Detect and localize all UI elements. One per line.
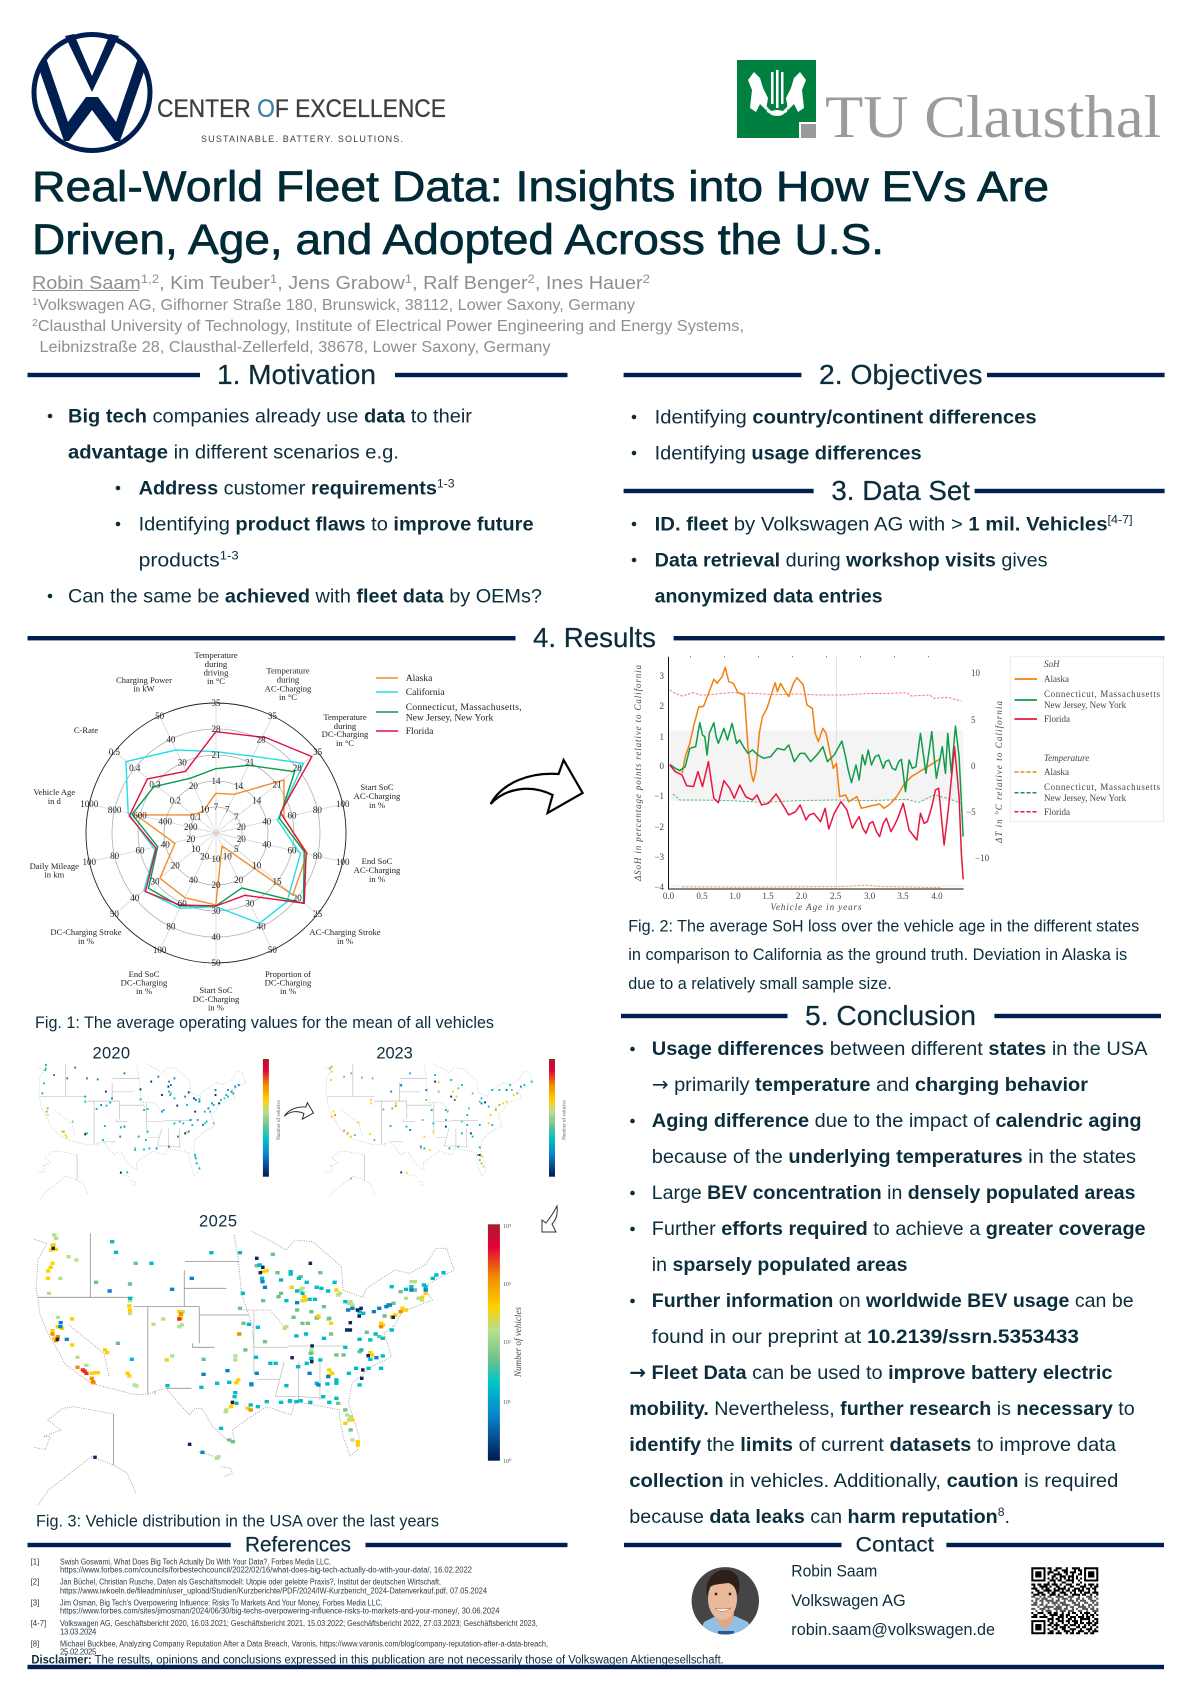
map: vehicles 2023: 2023 xyxy=(376,1044,413,1062)
chart axes labels: 1.5 xyxy=(762,891,774,901)
text: motivation bullets: 1-3 xyxy=(220,548,239,562)
logo: Volkswagen Center of Excellence xyxy=(34,34,446,150)
text: motivation bullets: Can the same be achieved with fleet data by OEMs? xyxy=(68,585,542,607)
authors and affiliations: , Ralf Benger xyxy=(412,273,528,293)
caption: figure 1: Fig. 1: The average operating values for the mean of all vehicles xyxy=(35,1014,494,1032)
radar tick values: 28 xyxy=(212,724,221,734)
radar axis labels: Temperature xyxy=(323,712,367,722)
radar tick values: 40 xyxy=(262,840,272,850)
text: motivation bullets: advantage in different scenarios e.g. xyxy=(68,441,399,463)
radar tick values: 5 xyxy=(234,844,239,854)
text: reference list: [8] xyxy=(31,1639,39,1648)
authors and affiliations: , Ines Hauer xyxy=(535,273,643,293)
radar tick values: 20 xyxy=(186,834,196,844)
radar axis labels: AC-Charging xyxy=(354,865,401,875)
radar axis labels: in % xyxy=(369,800,385,810)
line chart: SoH loss over vehicle age xyxy=(633,657,1164,912)
text: contact details: Robin Saam xyxy=(791,1563,877,1581)
radar axis labels: DC-Charging Stroke xyxy=(50,927,122,937)
authors and affiliations: 2 xyxy=(528,272,535,286)
text: reference list: Michael Buckbee, Analyzing Company Reputation After a Data Breach, Varonis, https://www.varonis.com/blog/company-reputation-after-a-data-breach, xyxy=(60,1639,548,1648)
chart legend: Temperature xyxy=(1044,753,1089,763)
radar axis labels: End SoC xyxy=(129,969,160,979)
radar tick values: 20 xyxy=(189,781,198,791)
map: vehicles 2020 xyxy=(38,1044,282,1200)
chart legend xyxy=(1010,657,1164,822)
radar tick values: 0.3 xyxy=(149,779,161,789)
text: conclusion summary: → Fleet Data can be used to improve battery electric xyxy=(629,1361,1113,1384)
text: conclusion bullets: because of the underlying temperatures in the states xyxy=(652,1146,1136,1168)
radar tick values: 25 xyxy=(313,909,323,919)
panel: contact xyxy=(624,1534,1164,1639)
radar tick values: 40 xyxy=(189,875,198,885)
caption: figure 3: Fig. 3: Vehicle distribution in the USA over the last years xyxy=(36,1513,439,1531)
text: reference list: https://www.forbes.com/sites/jimosman/2024/06/30/big-techs-overpowering-influence-risks-to-markets-and-your-money/, 30.06.2024 xyxy=(60,1607,500,1616)
colorbar: number of vehicles: 10² xyxy=(503,1340,511,1346)
radar legend: California xyxy=(406,687,445,698)
text: conclusion bullets: Aging difference due to the impact of calendric aging xyxy=(652,1110,1142,1132)
chart legend: Florida xyxy=(1044,714,1070,724)
chart axes labels: ΔT in °C relative to California xyxy=(994,700,1004,844)
radar axis labels: in % xyxy=(78,936,94,946)
radar axis labels: in % xyxy=(136,986,152,996)
text: contact details: robin.saam@volkswagen.de xyxy=(791,1621,995,1639)
text: contact details: Volkswagen AG xyxy=(791,1592,906,1610)
chart series xyxy=(670,667,963,888)
chart axes labels: −2 xyxy=(654,822,664,832)
radar tick values: 100 xyxy=(83,857,97,867)
map: vehicles 2020: Number of vehicles xyxy=(277,1100,282,1140)
text: reference list: [3] xyxy=(31,1599,39,1608)
radar axis labels: Daily Mileage xyxy=(30,861,79,871)
radar tick values: 14 xyxy=(212,776,221,786)
radar tick values: 10 xyxy=(200,805,210,815)
radar tick values: 14 xyxy=(234,781,244,791)
authors and affiliations: 1 xyxy=(270,272,278,286)
radar tick values: 100 xyxy=(336,857,350,867)
title: Driven, Age, and Adopted Across the U.S. xyxy=(32,216,884,264)
text: conclusion summary: because data leaks can harm reputation xyxy=(629,1506,996,1528)
radar axis labels: End SoC xyxy=(362,856,393,866)
text: objectives bullets: Identifying country/continent differences xyxy=(655,406,1037,428)
radar axis labels: in °C xyxy=(207,676,225,686)
radar axis labels: Vehicle Age xyxy=(33,787,75,797)
text: motivation bullets: Identifying product flaws to improve future xyxy=(139,513,534,535)
radar axis labels: Start SoC xyxy=(360,782,394,792)
chart axes labels: −3 xyxy=(654,852,664,862)
text: contact details xyxy=(791,1563,995,1639)
radar axis labels: in km xyxy=(44,870,65,880)
radar tick values: 0.4 xyxy=(129,763,141,773)
chart axes labels: 4.0 xyxy=(931,891,943,901)
radar tick values: 7 xyxy=(225,805,230,815)
authors and affiliations: 2 xyxy=(32,318,38,329)
radar axis labels: in % xyxy=(337,936,353,946)
authors and affiliations: 1 xyxy=(32,297,38,308)
radar tick values: 35 xyxy=(313,747,323,757)
text: reference list: [1] xyxy=(31,1558,39,1566)
radar legend xyxy=(376,673,522,737)
QR code xyxy=(1031,1567,1098,1634)
radar axis labels: in % xyxy=(208,1002,224,1012)
chart axes labels: 2.0 xyxy=(796,891,808,901)
text: reference list: Swish Goswami, What Does Big Tech Actually Do With Your Data?, Forbes Media LLC, xyxy=(60,1558,331,1566)
radar tick values: 50 xyxy=(155,711,165,721)
radar tick values: 1000 xyxy=(80,799,99,809)
radar legend: Connecticut, Massachusetts, xyxy=(406,702,522,713)
text: data set bullets: [4-7] xyxy=(1108,513,1133,527)
text: conclusion bullets: Large BEV concentration in densely populated areas xyxy=(652,1182,1136,1204)
chart axes labels: 3.5 xyxy=(897,891,909,901)
text: reference list: [2] xyxy=(31,1578,39,1587)
radar axis labels: Proportion of xyxy=(265,969,311,979)
radar tick values: 60 xyxy=(288,845,297,855)
photo: Robin Saam xyxy=(690,1565,760,1637)
radar tick values: 20 xyxy=(237,822,246,832)
radar tick values: 200 xyxy=(184,822,198,832)
caption: figure 2: Fig. 2: The average SoH loss over the vehicle age in the different states xyxy=(628,918,1139,936)
title: Real-World Fleet Data: Insights into How EVs Are xyxy=(32,163,1049,211)
chart legend: Connecticut, Massachusetts xyxy=(1044,689,1160,699)
panel: data set xyxy=(624,475,1165,608)
radar tick values: 20 xyxy=(171,860,180,870)
title xyxy=(32,163,1049,264)
text: conclusion bullets: Usage differences between different states in the USA xyxy=(652,1038,1148,1060)
radar tick values: 60 xyxy=(178,898,187,908)
map: vehicles 2020: 2020 xyxy=(92,1044,130,1062)
map: vehicles 2025: 2025 xyxy=(199,1213,237,1231)
radar tick values: 21 xyxy=(212,750,220,760)
chart axes labels: −4 xyxy=(654,882,664,892)
map: vehicles 2025 xyxy=(34,1213,523,1505)
caption: figure 2 xyxy=(628,918,1139,993)
radar tick values: 10 xyxy=(223,851,232,861)
disclaimer: Disclaimer: The results, opinions and conclusions expressed in this publication are not necessarily those of Volkswagen Aktiengesellschaft. xyxy=(31,1654,724,1666)
colorbar: number of vehicles xyxy=(488,1224,523,1465)
text: reference list: https://www.forbes.com/councils/forbestechcouncil/2022/02/16/what-does-big-tech-actually-do-with-your-data/, 16.02.2022 xyxy=(60,1566,472,1575)
radar axis labels: in d xyxy=(48,796,62,806)
text: conclusion bullets: Further efforts required to achieve a greater coverage xyxy=(652,1218,1146,1240)
radar tick values: 40 xyxy=(212,932,221,942)
authors and affiliations: 1,2 xyxy=(141,272,160,286)
radar tick values: 80 xyxy=(110,851,120,861)
radar tick values: 30 xyxy=(245,898,255,908)
text: conclusion bullets: found in our preprint at 10.2139/ssrn.5353433 xyxy=(652,1326,1079,1348)
chart legend: Alaska xyxy=(1044,767,1069,777)
radar axis labels: AC-Charging Stroke xyxy=(309,927,381,937)
caption: figure 2: in comparison to California as the ground truth. Deviation in Alaska is xyxy=(628,946,1127,964)
radar tick values: 600 xyxy=(133,811,147,821)
authors and affiliations xyxy=(32,272,744,356)
radar axis labels: Start SoC xyxy=(199,985,233,995)
radar tick values: 80 xyxy=(166,922,176,932)
radar axis labels: in % xyxy=(369,874,385,884)
radar tick values: 800 xyxy=(108,805,122,815)
radar tick values: 28 xyxy=(257,734,266,744)
logo: Volkswagen Center of Excellence: CENTER OF EXCELLENCE xyxy=(157,95,446,123)
chart axes labels: 0 xyxy=(971,761,976,771)
arrow: 2020 to 2023 xyxy=(284,1103,313,1119)
radar tick values: 50 xyxy=(110,909,119,919)
disclaimer xyxy=(28,1654,1164,1669)
chart axes labels: 2.5 xyxy=(830,891,842,901)
chart axes labels: 1 xyxy=(660,732,664,742)
radar legend: Florida xyxy=(406,726,434,737)
authors and affiliations: 1 xyxy=(405,272,412,286)
chart axes labels: −10 xyxy=(975,853,990,863)
radar tick values: 0.1 xyxy=(190,812,201,822)
chart axes labels: 10 xyxy=(971,668,980,678)
panel: motivation xyxy=(28,359,568,607)
chart axes labels: −1 xyxy=(654,791,664,801)
radar axis labels: DC-Charging xyxy=(121,978,168,988)
radar tick values: 20 xyxy=(293,893,302,903)
radar axis labels: during xyxy=(334,721,357,731)
chart axes labels: 2 xyxy=(660,701,664,711)
authors and affiliations: Robin Saam xyxy=(32,273,131,293)
radar axis labels: DC-Charging xyxy=(193,994,240,1004)
text: conclusion summary: mobility. Nevertheless, further research is necessary to xyxy=(629,1398,1135,1420)
radar tick values: 10 xyxy=(212,854,221,864)
text: data set bullets: ID. fleet by Volkswagen AG with > 1 mil. Vehicles xyxy=(655,514,1102,536)
radar tick values: 40 xyxy=(262,816,272,826)
radar axis labels: driving xyxy=(204,668,229,678)
text: conclusion bullets: in sparsely populated areas xyxy=(652,1254,908,1276)
radar axis labels: in °C xyxy=(279,692,297,702)
text: data set bullets: Data retrieval during workshop visits gives xyxy=(655,550,1048,572)
chart legend: Connecticut, Massachusetts xyxy=(1044,782,1160,792)
radar tick values: 30 xyxy=(212,906,221,916)
radar tick values: 400 xyxy=(159,816,173,826)
chart legend: SoH xyxy=(1044,659,1060,669)
heading: contact: Contact xyxy=(856,1534,934,1557)
heading: motivation: 1. Motivation xyxy=(217,359,376,390)
radar tick values: 20 xyxy=(237,834,246,844)
radar tick values: 7 xyxy=(214,802,219,812)
text: conclusion summary: 8 xyxy=(998,1505,1005,1519)
radar axis labels: Temperature xyxy=(266,666,310,676)
text: motivation bullets: Address customer requirements xyxy=(139,477,435,499)
radar axis labels: AC-Charging xyxy=(354,791,401,801)
radar tick values: 20 xyxy=(212,880,221,890)
panel: conclusion xyxy=(621,1000,1161,1528)
radar tick values: 100 xyxy=(336,799,350,809)
radar tick values: 20 xyxy=(200,851,210,861)
heading: references: References xyxy=(245,1534,351,1557)
chart legend: Florida xyxy=(1044,807,1070,817)
text: objectives bullets: Identifying usage differences xyxy=(655,442,922,464)
radar tick values: 10 xyxy=(252,860,262,870)
radar tick values: 40 xyxy=(161,840,170,850)
radar axis labels: during xyxy=(277,675,300,685)
radar tick values: 50 xyxy=(268,945,277,955)
chart axes labels: Vehicle Age in years xyxy=(770,902,862,912)
radar axis labels: AC-Charging xyxy=(265,683,312,693)
authors and affiliations: , Kim Teuber xyxy=(159,273,270,293)
panel: references xyxy=(28,1534,568,1657)
radar tick values: 60 xyxy=(136,845,145,855)
radar axis labels: DC-Charging xyxy=(322,729,369,739)
chart axes labels: 3 xyxy=(660,671,664,681)
heading: conclusion: 5. Conclusion xyxy=(805,1000,976,1031)
radar tick values: 0.5 xyxy=(109,747,121,757)
authors and affiliations: Clausthal University of Technology, Institute of Electrical Power Engineering and Energy Systems, xyxy=(38,318,744,335)
radar tick values: 14 xyxy=(252,796,262,806)
radar tick values: 7 xyxy=(234,812,239,822)
chart axes labels: 3.0 xyxy=(864,891,876,901)
radar tick values: 40 xyxy=(257,922,266,932)
text: reference list: https://www.iwkoeln.de/fileadmin/user_upload/Studien/Kurzberichte/PDF/2024/IW-Kurzbericht_2024-Datenverkauf.pdf, 07.05.2024 xyxy=(60,1587,488,1596)
radar axis labels: in kW xyxy=(133,684,156,694)
heading: results xyxy=(28,622,1165,653)
radar axis labels: Temperature xyxy=(194,650,238,660)
text: reference list xyxy=(31,1558,548,1657)
radar tick values: 35 xyxy=(212,698,221,708)
logo: Volkswagen Center of Excellence: SUSTAINABLE. BATTERY. SOLUTIONS. xyxy=(201,134,403,144)
text: conclusion bullets: Further information on worldwide BEV usage can be xyxy=(652,1290,1134,1312)
radar axis labels: during xyxy=(205,659,228,669)
map: vehicles 2023: Number of vehicles xyxy=(563,1100,568,1140)
arrow: 2023 to 2025 xyxy=(542,1206,557,1232)
radar axis labels: DC-Charging xyxy=(265,978,312,988)
radar tick values: 40 xyxy=(130,893,140,903)
text: reference list: [4-7] xyxy=(31,1619,46,1628)
radar axis labels: Charging Power xyxy=(116,675,172,685)
radar tick values: 40 xyxy=(166,734,176,744)
radar tick values: 0.2 xyxy=(170,796,181,806)
text: reference list: Jan Büchel, Christian Rusche, Daten als Geschäftsmodell: Utopie oder gelebte Praxis?, Institut der deutschen Wirtschaft, xyxy=(60,1578,441,1587)
radar axis labels: in °C xyxy=(336,738,354,748)
authors and affiliations: 2 xyxy=(643,272,650,286)
caption: figure 2: due to a relatively small sample size. xyxy=(628,975,892,993)
colorbar: number of vehicles: 10⁴ xyxy=(503,1224,511,1230)
chart axes labels: 1.0 xyxy=(729,891,741,901)
radar tick values: 10 xyxy=(191,844,201,854)
panel: objectives xyxy=(624,359,1165,464)
text: reference list: 13.03.2024 xyxy=(60,1627,97,1636)
chart axes labels: −5 xyxy=(966,807,976,817)
authors and affiliations: , Jens Grabow xyxy=(277,273,406,293)
radar tick values xyxy=(80,698,350,968)
text: motivation bullets: products xyxy=(139,549,213,571)
radar tick values: 60 xyxy=(288,811,297,821)
logo: TU Clausthal: TU Clausthal xyxy=(825,84,1161,150)
heading: data set: 3. Data Set xyxy=(831,475,970,506)
arrow: from radar to SoH chart xyxy=(491,760,583,813)
heading: results: 4. Results xyxy=(533,622,656,653)
radar tick values: 30 xyxy=(178,758,187,768)
radar axis labels: in % xyxy=(280,986,296,996)
radar tick values: 21 xyxy=(272,779,282,789)
text: conclusion bullets: → primarily temperature and charging behavior xyxy=(652,1073,1088,1096)
radar legend: New Jersey, New York xyxy=(406,712,493,724)
chart axes labels: 0.5 xyxy=(696,891,708,901)
radar axis labels: C-Rate xyxy=(74,725,98,735)
colorbar: number of vehicles: 10³ xyxy=(503,1282,511,1288)
chart legend: New Jersey, New York xyxy=(1044,700,1127,710)
radar tick values: 28 xyxy=(293,763,302,773)
radar axis labels xyxy=(30,650,401,1012)
radar tick values: 20 xyxy=(234,875,244,885)
chart axes labels: 5 xyxy=(971,715,976,725)
text: conclusion summary: collection in vehicles. Additionally, caution is required xyxy=(629,1470,1118,1492)
logo: TU Clausthal xyxy=(737,60,1161,150)
radar legend: Alaska xyxy=(406,673,433,684)
text: conclusion summary xyxy=(629,1361,1135,1528)
radar tick values: 50 xyxy=(212,958,221,968)
chart legend: New Jersey, New York xyxy=(1044,793,1127,803)
text: motivation bullets: 1-3 xyxy=(437,476,455,490)
radar tick values: 80 xyxy=(313,805,322,815)
text: data set bullets: anonymized data entries xyxy=(655,586,883,608)
text: conclusion summary: identify the limits of current datasets to improve data xyxy=(629,1434,1116,1456)
heading: objectives: 2. Objectives xyxy=(819,359,982,390)
map: vehicles 2023 xyxy=(325,1044,568,1200)
text: data set bullets xyxy=(632,513,1133,608)
radar tick values: 30 xyxy=(150,877,160,887)
radar tick values: 21 xyxy=(245,758,254,768)
chart axes labels: ΔSoH in percentage points relative to California xyxy=(633,664,643,882)
colorbar: number of vehicles: Number of vehicles xyxy=(513,1307,523,1378)
colorbar: number of vehicles: 10¹ xyxy=(503,1400,511,1406)
chart legend: Alaska xyxy=(1044,674,1069,684)
radar series: Alaska, California, Northeast states, Florida xyxy=(126,732,312,923)
authors and affiliations: Leibnizstraße 28, Clausthal-Zellerfeld, 38678, Lower Saxony, Germany xyxy=(40,339,551,356)
text: reference list: Volkswagen AG, Geschäftsbericht 2020, 16.03.2021; Geschäftsbericht 2021, 15.03.2022; Geschäftsbericht 2022, 27.03.2023; Geschäftsbericht 2023, xyxy=(60,1619,538,1628)
chart axes labels xyxy=(633,664,1004,912)
text: reference list: 25.02.2025 xyxy=(60,1648,97,1657)
colorbar: number of vehicles: 10⁰ xyxy=(503,1458,512,1465)
text: objectives bullets xyxy=(632,406,1037,464)
text: conclusion summary: . xyxy=(1005,1506,1010,1528)
radar chart: average operating values xyxy=(30,650,522,1012)
chart axes labels: 0.0 xyxy=(663,891,675,901)
text: conclusion bullets xyxy=(630,1038,1148,1348)
text: motivation bullets xyxy=(48,405,542,607)
radar tick values: 15 xyxy=(272,877,282,887)
text: reference list: Jim Osman, Big Tech's Overpowering Influence: Risks To Markets And Your Money, Forbes Media LLC, xyxy=(60,1599,383,1608)
authors and affiliations: Volkswagen AG, Gifhorner Straße 180, Brunswick, 38112, Lower Saxony, Germany xyxy=(38,297,635,314)
radar tick values: 80 xyxy=(313,851,322,861)
radar tick values: 35 xyxy=(268,711,277,721)
radar tick values: 100 xyxy=(153,945,167,955)
text: motivation bullets: Big tech companies already use data to their xyxy=(68,405,473,427)
chart axes labels: 0 xyxy=(660,761,664,771)
